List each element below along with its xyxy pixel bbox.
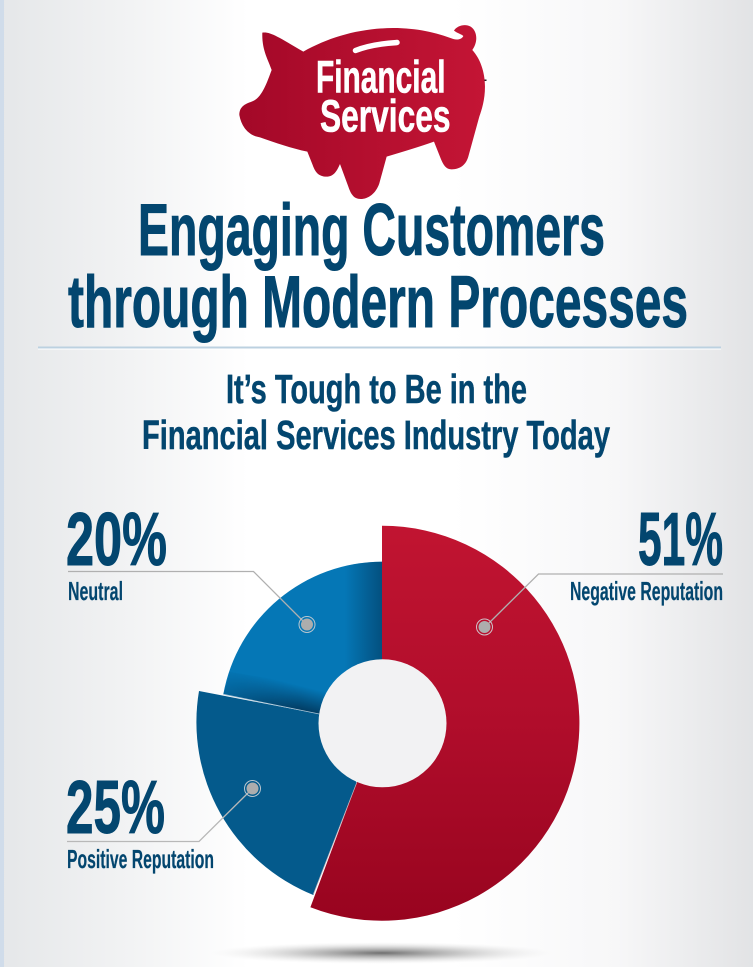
label positive reputation: Positive Reputation [67,844,214,874]
label neutral: Neutral [68,576,123,606]
logo text: Financial Services [316,52,450,142]
segment: neutral 20% [223,562,382,723]
icon: piggy bank logo [239,25,485,199]
segment: negative reputation 51% [310,526,579,921]
centre hole [318,659,446,787]
subtitle: It’s Tough to Be in the [226,366,527,412]
value 25%: 25% [66,765,165,849]
logo text: Financial Services: Services [320,90,450,142]
chart shadow [210,942,554,964]
callout: positive reputation [66,765,260,874]
title [68,190,688,343]
logo text: Financial Services: Financial [316,52,446,102]
icon: coin slot highlight [356,42,397,50]
speck near logo [484,80,486,81]
callout: neutral [66,497,315,632]
callout: negative reputation [476,497,723,635]
subtitle [142,366,610,458]
donut chart [196,526,579,921]
segment: positive reputation 25% [196,691,357,895]
value 20%: 20% [66,497,167,581]
